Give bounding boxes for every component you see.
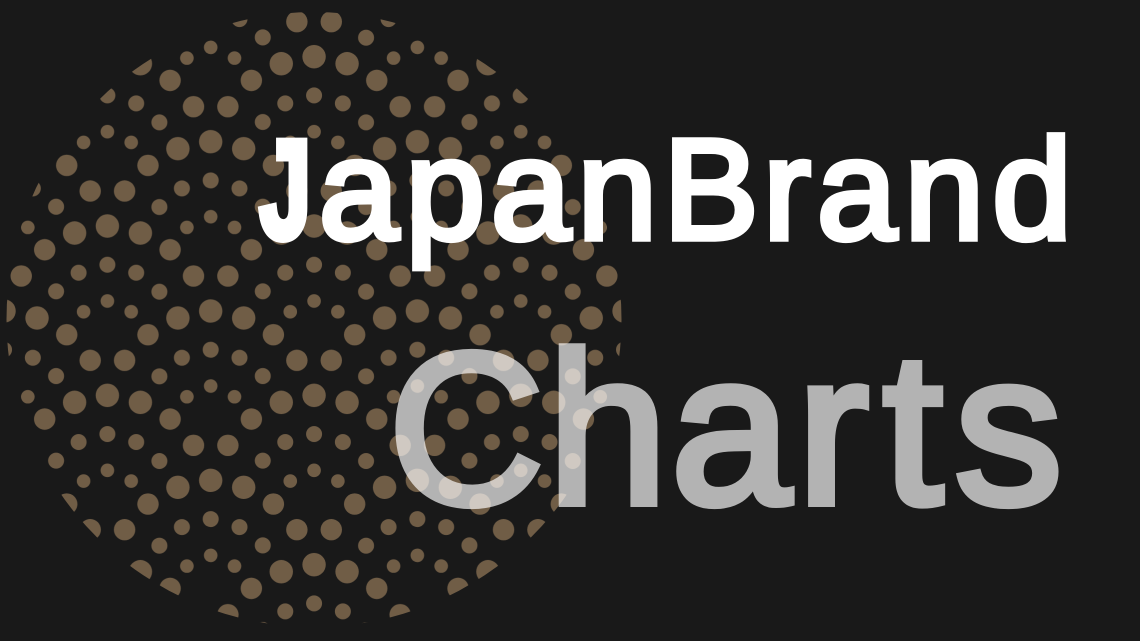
title: JapanBrand: apanBrand xyxy=(319,111,1072,270)
title: JapanBrand: J xyxy=(262,118,309,263)
dotted circle pattern xyxy=(6,12,622,627)
subtitle: Charts: Charts xyxy=(388,308,1062,549)
